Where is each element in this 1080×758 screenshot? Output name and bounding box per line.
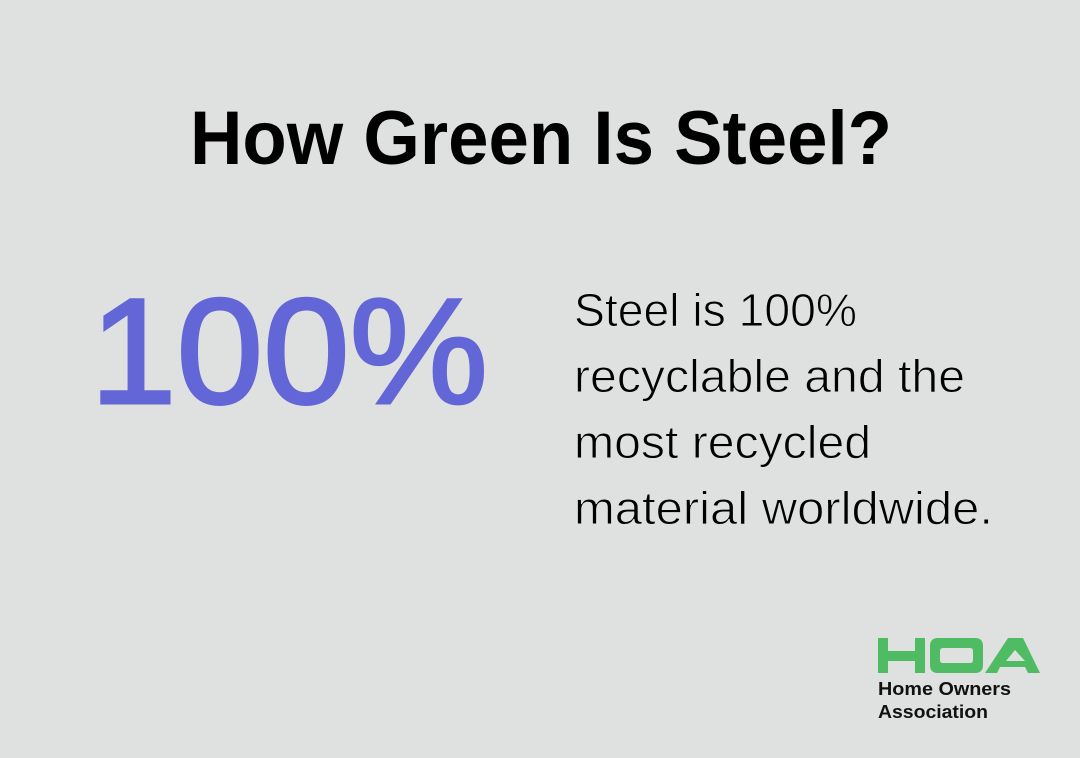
logo wordmark: Association xyxy=(878,702,988,722)
big statistic: 100%: 100% xyxy=(90,267,488,435)
logo wordmark: Home Owners xyxy=(878,679,1011,699)
statistic description: Steel is 100% xyxy=(574,284,857,336)
statistic description: most recycled xyxy=(574,416,871,468)
title: How Green Is Steel? xyxy=(190,96,892,181)
logo: Home Owners Association xyxy=(878,638,1040,722)
logo letters HOA xyxy=(878,638,1040,673)
logo wordmark xyxy=(878,679,1011,722)
statistic description: recyclable and the xyxy=(574,350,965,402)
statistic description: material worldwide. xyxy=(574,482,993,534)
statistic description xyxy=(574,284,993,534)
